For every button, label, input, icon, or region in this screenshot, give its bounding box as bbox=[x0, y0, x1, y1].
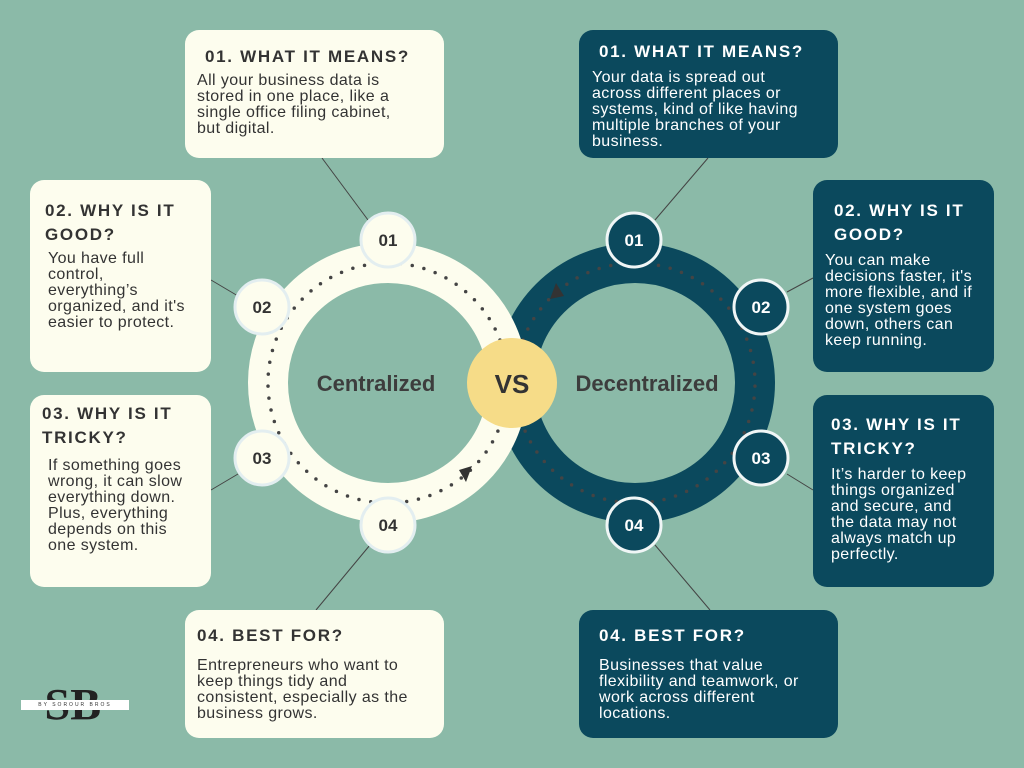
panel: decentralized 03: TRICKY? bbox=[831, 439, 917, 458]
nodes: 01 bbox=[625, 231, 643, 250]
panel: decentralized 04: 04. BEST FOR? bbox=[599, 626, 746, 645]
panel: decentralized 03 bbox=[813, 395, 994, 587]
panel: centralized 01 bbox=[185, 30, 444, 158]
panel: decentralized 04: flexibility and teamwork, or bbox=[599, 673, 799, 690]
panel: decentralized 02: more flexible, and if bbox=[825, 284, 972, 301]
panel: decentralized 03: and secure, and bbox=[831, 498, 952, 515]
vs circle: VS bbox=[495, 369, 529, 399]
panel: decentralized 01: business. bbox=[592, 133, 663, 150]
nodes: 03 bbox=[253, 449, 271, 468]
panel: centralized 03: Plus, everything bbox=[48, 505, 168, 522]
panel: decentralized 03: the data may not bbox=[831, 514, 957, 531]
panel: centralized 01: stored in one place, like a bbox=[197, 88, 389, 105]
nodes bbox=[235, 213, 788, 552]
panel: decentralized 01 bbox=[579, 30, 838, 158]
panel: decentralized 03: things organized bbox=[831, 482, 955, 499]
panel: decentralized 01: multiple branches of your bbox=[592, 117, 781, 134]
panel: centralized 01: but digital. bbox=[197, 120, 275, 137]
panel: centralized 04: consistent, especially as the bbox=[197, 689, 408, 706]
logo: SB bbox=[44, 680, 101, 729]
vs circle bbox=[467, 338, 557, 428]
panel: centralized 04: 04. BEST FOR? bbox=[197, 626, 344, 645]
panel: centralized 04: business grows. bbox=[197, 705, 318, 722]
panel: centralized 02: GOOD? bbox=[45, 225, 116, 244]
nodes: 02 bbox=[253, 298, 271, 317]
panel: centralized 03: TRICKY? bbox=[42, 428, 128, 447]
panel: centralized 02: You have full bbox=[48, 250, 144, 267]
panel: decentralized 02: one system goes bbox=[825, 300, 952, 317]
label: Decentralized: Decentralized bbox=[575, 371, 719, 396]
panel: decentralized 02: 02. WHY IS IT bbox=[834, 201, 964, 220]
panel: decentralized 01: Your data is spread out bbox=[592, 69, 765, 86]
panel: decentralized 01: across different places or bbox=[592, 85, 781, 102]
panel: decentralized 04: work across different bbox=[599, 689, 755, 706]
panel: centralized 04 bbox=[185, 610, 444, 738]
label: Centralized: Centralized bbox=[317, 371, 435, 396]
logo bbox=[21, 680, 129, 729]
nodes: 02 bbox=[752, 298, 770, 317]
panel: decentralized 04 bbox=[579, 610, 838, 738]
panel: centralized 03 bbox=[30, 395, 211, 587]
panel: decentralized 02: keep running. bbox=[825, 332, 927, 349]
panel: centralized 02: control, bbox=[48, 266, 104, 283]
panel: decentralized 02: decisions faster, it's bbox=[825, 268, 972, 285]
nodes: 04 bbox=[625, 516, 644, 535]
panel: centralized 02: organized, and it's bbox=[48, 298, 185, 315]
nodes: 03 bbox=[752, 449, 770, 468]
panel: centralized 04: Entrepreneurs who want to bbox=[197, 657, 398, 674]
panel: decentralized 01: systems, kind of like having bbox=[592, 101, 798, 118]
panel: decentralized 01: 01. WHAT IT MEANS? bbox=[599, 42, 804, 61]
panel: decentralized 03: 03. WHY IS IT bbox=[831, 415, 961, 434]
nodes: 01 bbox=[379, 231, 397, 250]
panel: decentralized 04: Businesses that value bbox=[599, 657, 763, 674]
panel: decentralized 03: perfectly. bbox=[831, 546, 899, 563]
panel: centralized 01: All your business data is bbox=[197, 72, 380, 89]
panel: decentralized 02: GOOD? bbox=[834, 225, 905, 244]
panel: decentralized 03: always match up bbox=[831, 530, 956, 547]
panel: centralized 03: If something goes bbox=[48, 457, 181, 474]
panel: centralized 02: easier to protect. bbox=[48, 314, 174, 331]
panel: decentralized 02 bbox=[813, 180, 994, 372]
panel: centralized 03: depends on this bbox=[48, 521, 167, 538]
panel: decentralized 03: It’s harder to keep bbox=[831, 466, 966, 483]
panel: centralized 02 bbox=[30, 180, 211, 372]
panel: centralized 01: 01. WHAT IT MEANS? bbox=[205, 47, 410, 66]
panel: centralized 03: one system. bbox=[48, 537, 139, 554]
panel: centralized 01: single office filing cabinet, bbox=[197, 104, 391, 121]
nodes: 04 bbox=[379, 516, 398, 535]
panel: centralized 03: wrong, it can slow bbox=[48, 473, 182, 490]
ring: centralized bbox=[268, 263, 508, 503]
panel: centralized 02: everything’s bbox=[48, 282, 138, 299]
panel: centralized 03: 03. WHY IS IT bbox=[42, 404, 172, 423]
panel: centralized 03: everything down. bbox=[48, 489, 175, 506]
panel: decentralized 02: down, others can bbox=[825, 316, 953, 333]
logo: BY SOROUR BROS bbox=[38, 702, 112, 708]
ring: decentralized bbox=[515, 263, 755, 503]
panel: centralized 02: 02. WHY IS IT bbox=[45, 201, 175, 220]
panel: centralized 04: keep things tidy and bbox=[197, 673, 347, 690]
panel: decentralized 04: locations. bbox=[599, 705, 671, 722]
panel: decentralized 02: You can make bbox=[825, 252, 931, 269]
